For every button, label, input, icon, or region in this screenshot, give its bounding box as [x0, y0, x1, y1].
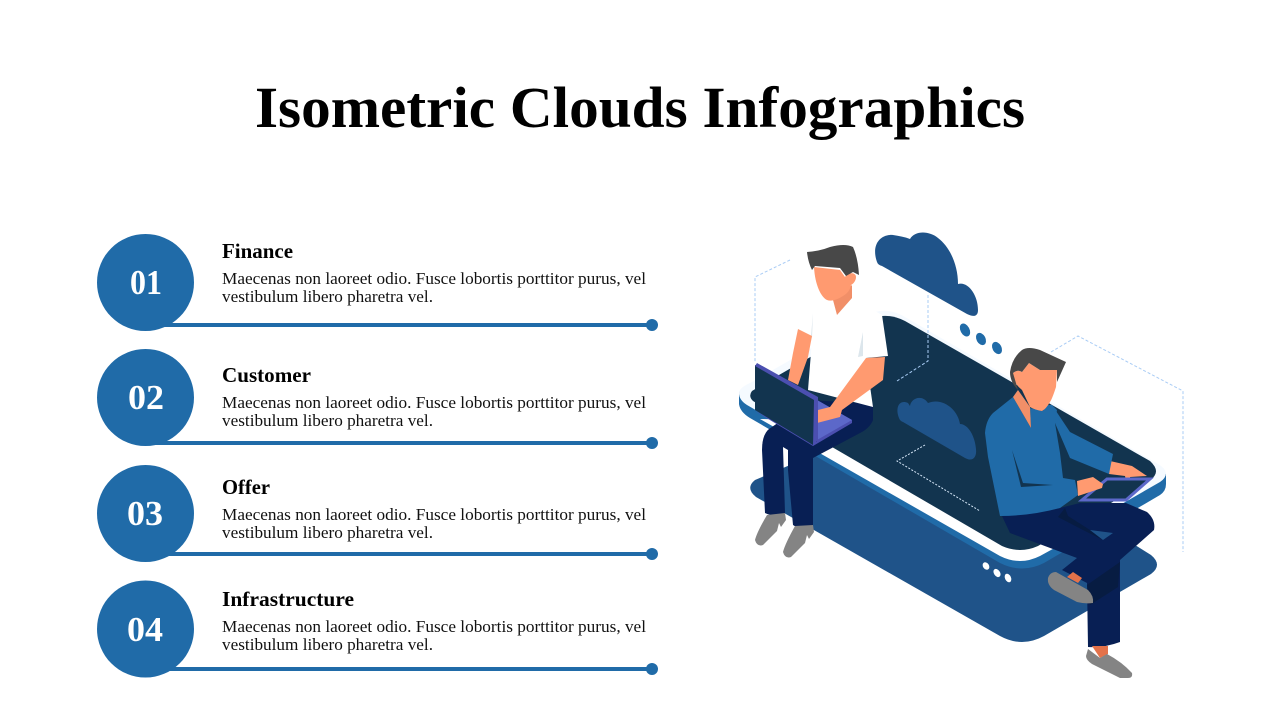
list item 02: Customer [97, 349, 658, 449]
connector line 04 [150, 663, 658, 675]
isometric illustration [739, 232, 1183, 678]
laptop [755, 357, 885, 446]
list item 01: Finance [97, 234, 658, 331]
dashed hexagon lines [755, 260, 1183, 552]
face [1013, 363, 1057, 411]
heading: Customer: Customer [222, 363, 311, 387]
sleeve fold [1012, 450, 1053, 487]
number badge 04: 04 [127, 610, 163, 649]
list item 04: Infrastructure [97, 580, 658, 678]
icon: large cloud [875, 232, 978, 316]
number badge 01: 01 [130, 263, 162, 302]
white dots on platform [981, 561, 1013, 583]
connector line 03 [150, 548, 658, 560]
number badge 03: 03 [127, 494, 163, 533]
hair [1010, 348, 1066, 390]
shoes [755, 513, 814, 557]
trousers [1002, 503, 1154, 647]
far hand [1109, 461, 1147, 485]
trousers [762, 400, 873, 528]
platform dark screen [750, 316, 1156, 550]
number badge 04 [97, 580, 194, 678]
right arm [817, 357, 885, 423]
platform base layer [750, 440, 1157, 642]
screen circuit lines [897, 295, 980, 511]
trouser shading [1087, 562, 1120, 605]
body text 03: Maecenas non laoreet odio. Fusce lobortis porttitor purus, vel [222, 505, 646, 524]
title: Isometric Clouds Infographics [255, 75, 1025, 140]
heading: Infrastructure: Infrastructure [222, 587, 354, 611]
body text 01: Maecenas non laoreet odio. Fusce lobortis porttitor purus, vel [222, 269, 646, 288]
platform blue side layer [739, 370, 1166, 568]
thought dots [958, 322, 1004, 356]
far sleeve [1040, 405, 1113, 474]
platform white top layer [739, 311, 1166, 556]
body text 03 [222, 505, 646, 542]
torso and near sleeve [985, 397, 1078, 516]
body text 01: vestibulum libero pharetra vel. [222, 287, 433, 306]
body text 02: Maecenas non laoreet odio. Fusce lobortis porttitor purus, vel [222, 393, 646, 412]
man on left with laptop [755, 245, 888, 557]
body text 03: vestibulum libero pharetra vel. [222, 523, 433, 542]
number badge 01 [97, 234, 194, 331]
face [814, 267, 856, 301]
tablet [1082, 479, 1150, 500]
body text 04: vestibulum libero pharetra vel. [222, 635, 433, 654]
body text 01 [222, 269, 646, 306]
heading: Finance: Finance [222, 239, 293, 263]
body text 02 [222, 393, 646, 430]
t-shirt [798, 298, 888, 407]
icon: inner cloud [897, 398, 976, 460]
number badge 03 [97, 465, 194, 562]
neck [1013, 390, 1031, 428]
list item 03: Offer [97, 465, 658, 562]
body text 04: Maecenas non laoreet odio. Fusce lobortis porttitor purus, vel [222, 617, 646, 636]
man on right with tablet [985, 348, 1154, 678]
connector line 01 [150, 319, 658, 331]
connector line 02 [150, 437, 658, 449]
near hand [1077, 477, 1103, 496]
body text 04 [222, 617, 646, 654]
hair [807, 245, 859, 276]
shirt shading [858, 332, 863, 357]
heading: Offer: Offer [222, 475, 270, 499]
neck [833, 285, 852, 315]
number badge 02: 02 [128, 378, 164, 417]
number badge 02 [97, 349, 194, 446]
left arm [788, 329, 812, 385]
shoes [1048, 572, 1132, 678]
body text 02: vestibulum libero pharetra vel. [222, 411, 433, 430]
socks [1067, 572, 1108, 658]
